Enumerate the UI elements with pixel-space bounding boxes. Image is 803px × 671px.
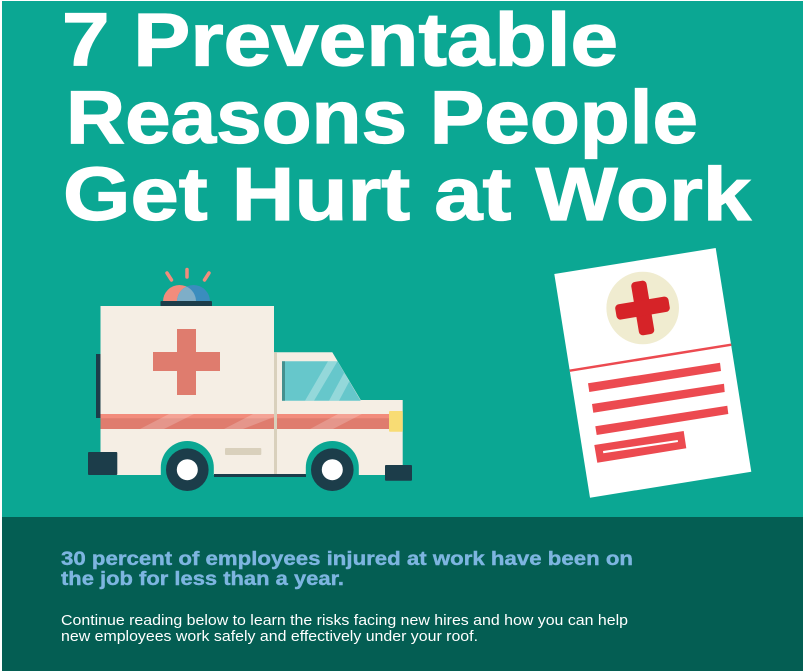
cab divider bbox=[274, 352, 277, 475]
intro text: Continue reading below to learn the risks facing new hires and how you can help bbox=[61, 612, 628, 629]
statistic heading bbox=[61, 548, 633, 590]
intro text: new employees work safely and effectively under your roof. bbox=[61, 628, 478, 645]
title bbox=[62, 0, 751, 236]
icon: medical report bbox=[554, 248, 751, 498]
side stripe bbox=[100, 414, 389, 429]
rear box body bbox=[100, 306, 274, 475]
red cross bbox=[611, 277, 674, 339]
statistic heading: 30 percent of employees injured at work have been on bbox=[61, 548, 633, 570]
front wheel bbox=[306, 441, 359, 491]
front bumper bbox=[385, 465, 412, 481]
text bars bbox=[588, 363, 728, 463]
paper bbox=[554, 248, 751, 498]
cab body bbox=[274, 352, 403, 475]
siren dome bbox=[160, 285, 212, 306]
divider line bbox=[570, 345, 731, 371]
rear wheel bbox=[161, 441, 214, 491]
cross bbox=[153, 329, 220, 395]
badge circle bbox=[606, 272, 679, 344]
panel: dark footer bbox=[2, 517, 803, 671]
statistic heading: the job for less than a year. bbox=[61, 568, 344, 590]
title: Get Hurt at Work bbox=[63, 152, 751, 236]
door handle bbox=[225, 448, 261, 455]
title: Reasons People bbox=[66, 75, 698, 159]
window bbox=[282, 361, 361, 401]
title: 7 Preventable bbox=[62, 0, 618, 82]
rear bumper bbox=[88, 452, 117, 475]
rear bar bbox=[96, 354, 100, 418]
panel: teal background bbox=[2, 1, 803, 517]
intro text bbox=[61, 612, 628, 645]
icon: ambulance bbox=[88, 270, 412, 491]
headlight bbox=[389, 411, 403, 432]
chassis bar bbox=[214, 474, 306, 477]
siren rays bbox=[167, 270, 209, 280]
